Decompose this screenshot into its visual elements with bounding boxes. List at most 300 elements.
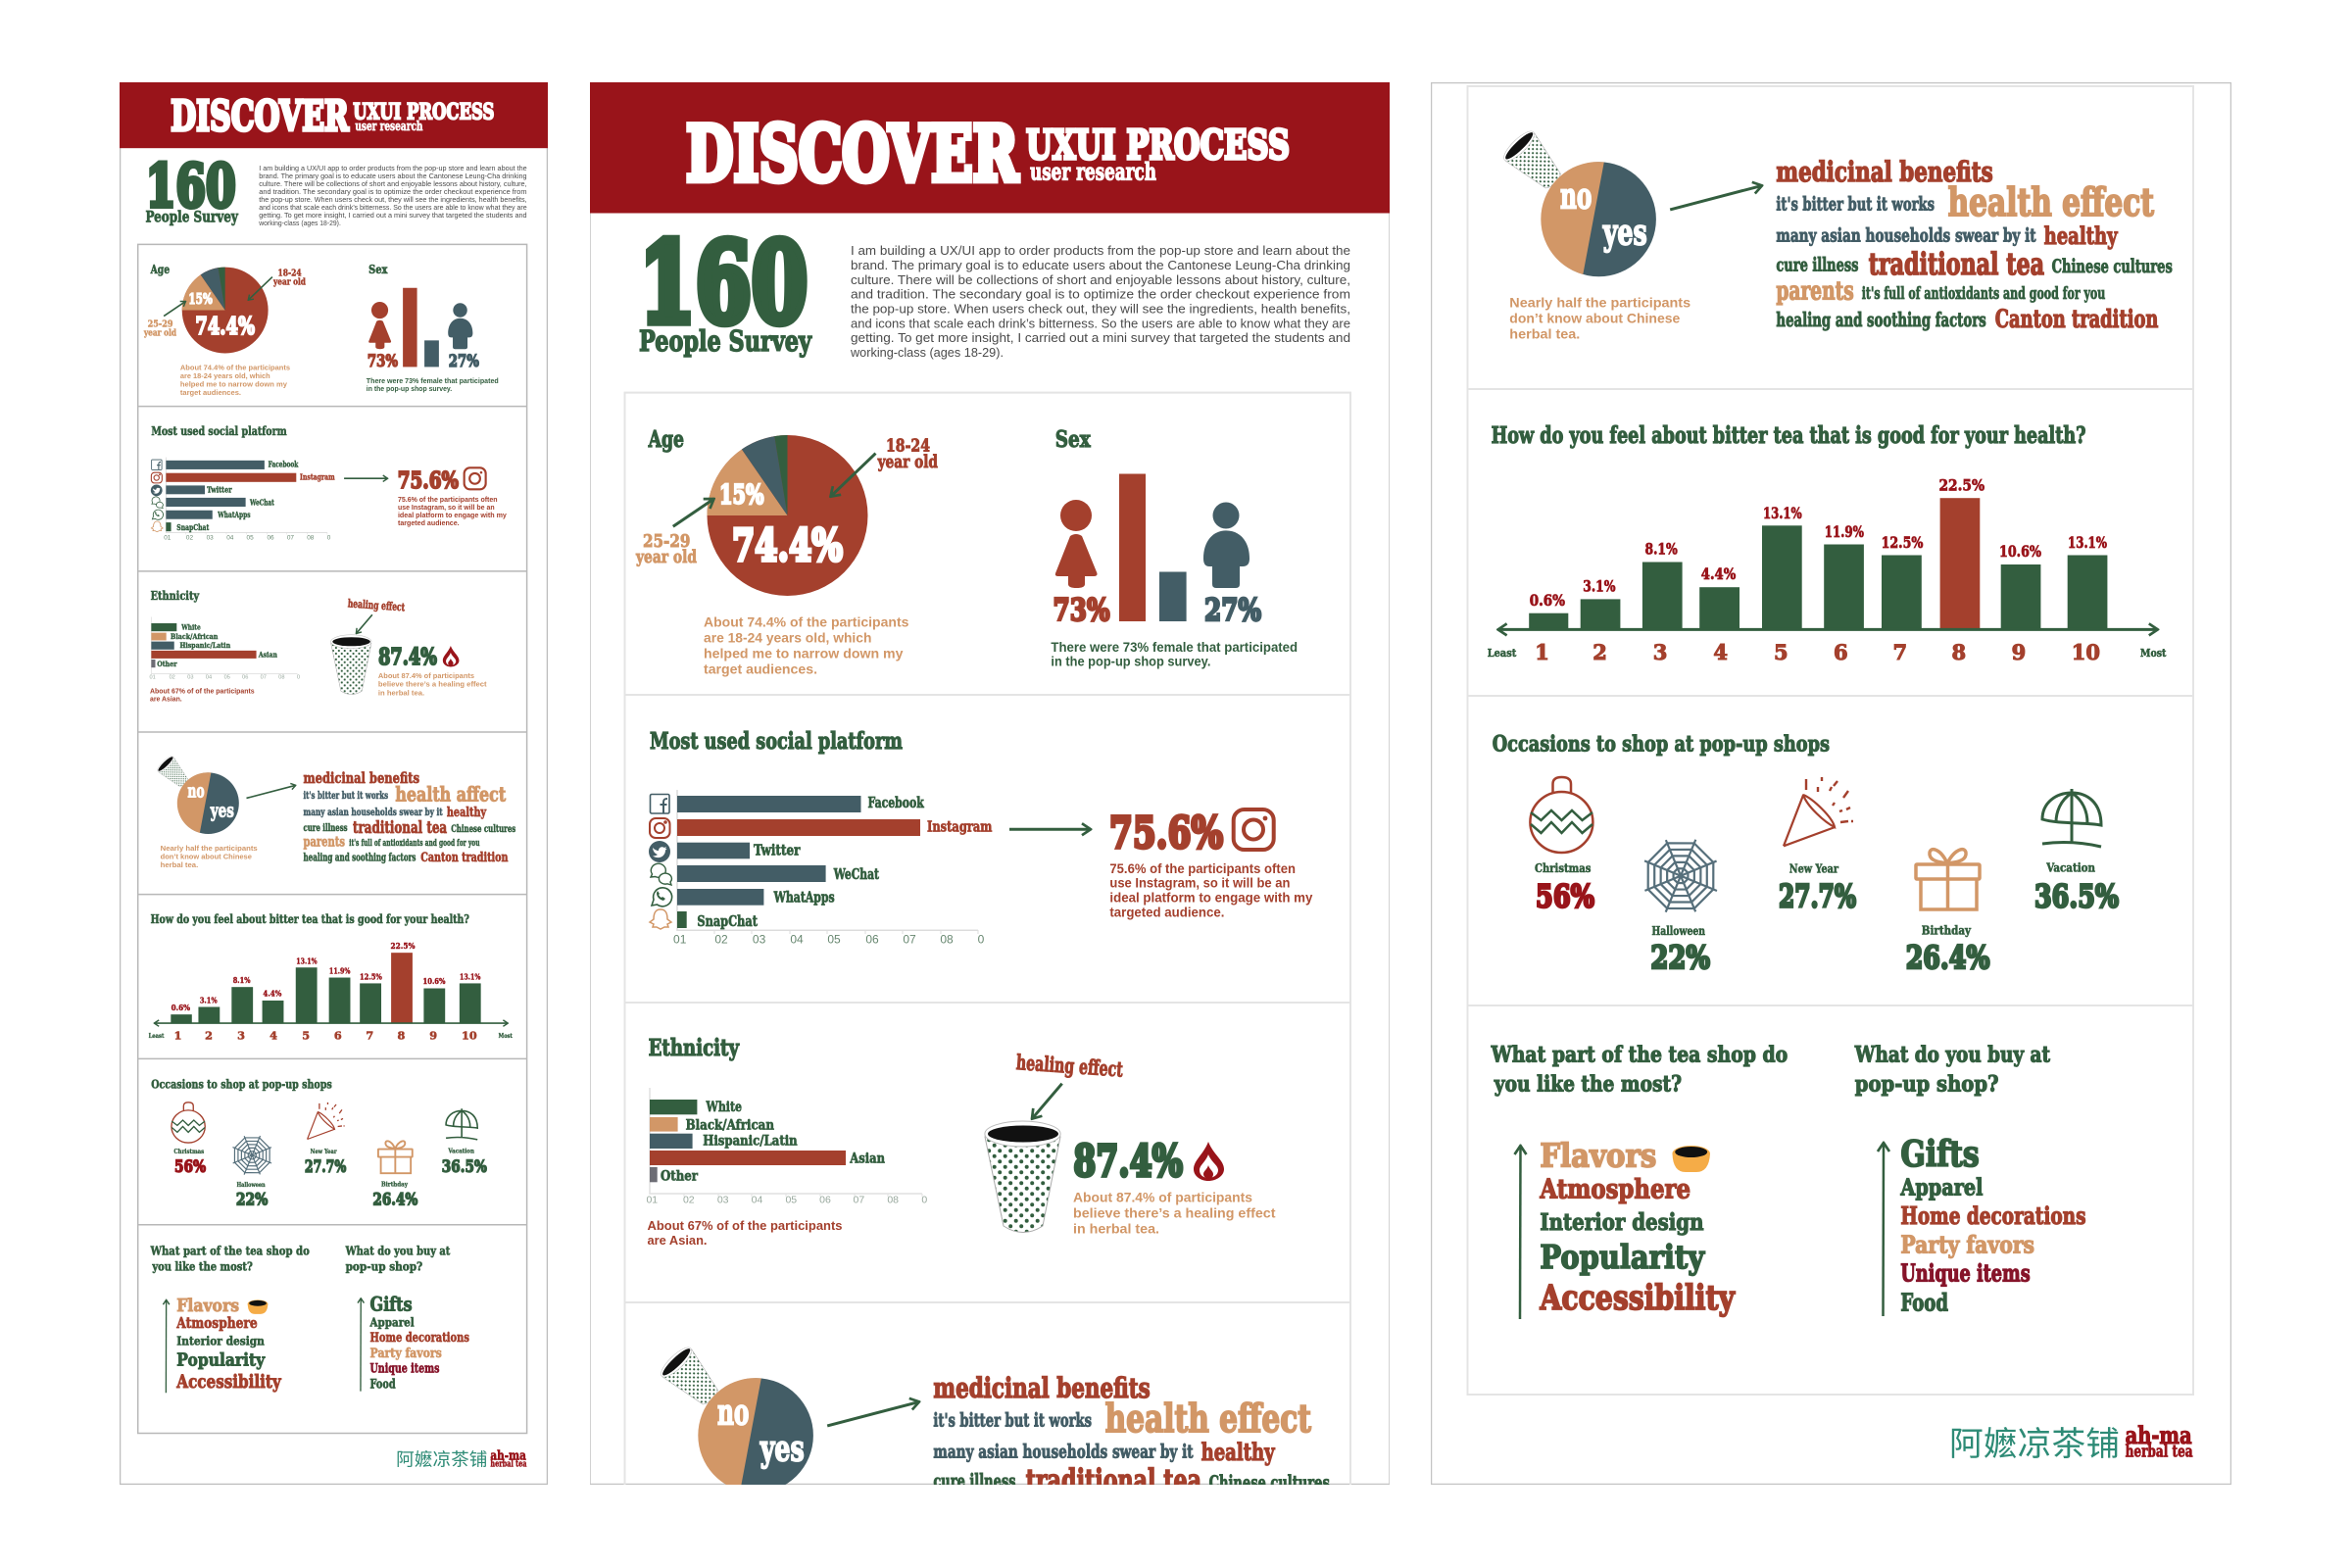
section: herbal tea awareness and word cloud: medicinal benefits	[303, 769, 419, 787]
section: favourite part of the tea shop: Flavors	[1540, 1137, 1656, 1175]
section: favourite part of the tea shop: What part of the tea shop do	[150, 1244, 310, 1257]
section: age: Age	[150, 262, 170, 276]
section: occasions: Occasions to shop at pop-up shops	[1493, 732, 1830, 758]
section: favourite part of the tea shop: you like the most?	[152, 1260, 253, 1274]
section: herbal tea awareness and word cloud: healthy	[2044, 221, 2118, 250]
section: bitter tea bar chart: 5	[302, 1029, 310, 1043]
intro paragraph: culture. There will be collections of short and enjoyable lessons about history, culture,	[851, 272, 1350, 287]
section: herbal tea awareness and word cloud: traditional tea	[353, 817, 447, 837]
section: herbal tea awareness and word cloud: Canton tradition	[1995, 305, 2158, 333]
section: what people buy: pop-up shop?	[1855, 1071, 1999, 1097]
section: age: 15%	[188, 291, 213, 308]
section: what people buy: Unique items	[1900, 1259, 2031, 1288]
section: ethnicity: 0	[921, 1195, 927, 1206]
section: bitter tea bar chart: 10	[462, 1029, 477, 1043]
section: herbal tea awareness and word cloud, cropped: healthy	[1201, 1438, 1275, 1466]
section: herbal tea awareness and word cloud, cropped: health effect	[1105, 1396, 1311, 1442]
section: herbal tea awareness and word cloud: no	[1560, 176, 1592, 218]
section: bitter tea bar chart: 10	[2072, 640, 2100, 664]
section: bitter tea bar chart: 3.1%	[1583, 577, 1615, 596]
section: herbal tea awareness and word cloud, cropped: Chinese cultures	[1209, 1472, 1330, 1494]
section: social platform: 01	[673, 933, 687, 947]
section: herbal tea awareness and word cloud: health affect	[395, 782, 506, 807]
section: ethnicity: 04	[752, 1195, 762, 1206]
section: occasions: Halloween	[236, 1181, 266, 1189]
section: occasions: New Year	[1789, 862, 1839, 876]
section: herbal tea awareness and word cloud: healthy	[447, 806, 487, 820]
section: age: 15%	[719, 480, 764, 511]
section: social platform: SnapChat	[176, 522, 210, 532]
header band: user research	[355, 120, 423, 134]
section: bitter tea bar chart: Most	[499, 1033, 513, 1040]
section: social platform: WhatApps	[217, 510, 251, 519]
section: social platform: Instagram	[300, 471, 335, 481]
section: favourite part of the tea shop: Atmosphere	[1540, 1175, 1690, 1205]
section: social platform: 08	[307, 535, 315, 542]
intro paragraph: and icons that scale each drink’s bitterness. So the users are able to know what they are	[851, 316, 1350, 330]
section: age	[143, 262, 306, 397]
section: occasions: 22%	[236, 1190, 268, 1209]
section: favourite part of the tea shop: Interior design	[1540, 1209, 1704, 1236]
section: sex: in the pop-up shop survey.	[367, 384, 452, 393]
section: bitter tea bar chart: 3	[1653, 640, 1667, 664]
stat: 160 people survey: People Survey	[639, 324, 812, 358]
section: occasions: Occasions to shop at pop-up shops	[151, 1078, 332, 1092]
section: ethnicity: Other	[661, 1168, 699, 1184]
panel: poster top detail	[590, 82, 1390, 1498]
section: age: year old	[877, 452, 938, 472]
section: ethnicity: 04	[206, 675, 212, 681]
section: favourite part of the tea shop: What part of the tea shop do	[1491, 1042, 1788, 1067]
section: age: year old	[272, 276, 306, 287]
section: ethnicity: 08	[887, 1195, 899, 1206]
section: herbal tea awareness and word cloud: herbal tea.	[161, 860, 198, 869]
intro paragraph: culture. There will be collections of short and enjoyable lessons about history, culture,	[259, 181, 527, 188]
section: occasions: 36.5%	[442, 1157, 487, 1177]
section: bitter tea bar chart: 22.5%	[1938, 475, 1984, 494]
section: ethnicity: 0	[297, 675, 300, 681]
section: age: About 74.4% of the participants	[704, 613, 909, 629]
section: bitter tea bar chart: 4	[1713, 640, 1728, 664]
section: herbal tea awareness and word cloud: cure illness	[1776, 254, 1858, 275]
section: herbal tea awareness and word cloud: don’t know about Chinese	[161, 852, 252, 860]
section: social platform: 07	[287, 535, 294, 542]
section: ethnicity: healing effect	[1015, 1050, 1124, 1082]
section frame	[138, 244, 527, 1434]
section: herbal tea awareness and word cloud: herbal tea.	[1509, 326, 1580, 342]
section: what people buy: Party favors	[370, 1347, 442, 1361]
section: ethnicity: believe there’s a healing effect	[1073, 1205, 1276, 1221]
section: what people buy: What do you buy at	[1854, 1042, 2050, 1067]
section: herbal tea awareness and word cloud	[155, 754, 515, 869]
header band: UXUI PROCESS	[1026, 122, 1290, 169]
section: social platform: 0	[327, 535, 331, 542]
section: bitter tea bar chart	[149, 911, 513, 1043]
header band: UXUI PROCESS	[353, 99, 494, 124]
section: social platform: 04	[226, 535, 234, 542]
section: occasions: Christmas	[1535, 861, 1592, 875]
section: bitter tea bar chart: 3	[237, 1029, 245, 1043]
section frame	[1468, 86, 2193, 1395]
section: age: Age	[648, 426, 684, 453]
section: social platform: 0	[978, 933, 985, 947]
section: sex: 73%	[368, 351, 398, 370]
section: bitter tea bar chart: 8.1%	[233, 976, 251, 986]
section: herbal tea awareness and word cloud: it's full of antioxidants and good for you	[349, 838, 480, 849]
section: occasions: Halloween	[1652, 924, 1705, 938]
section: age: 18-24	[278, 268, 302, 278]
section: occasions: 27.7%	[305, 1157, 346, 1177]
section: bitter tea bar chart: How do you feel about bitter tea that is good for your health?	[1492, 422, 2085, 449]
section: herbal tea awareness and word cloud: it's bitter but it works	[1776, 194, 1935, 216]
section: bitter tea bar chart: 7	[366, 1029, 373, 1043]
section: social platform: WeChat	[833, 865, 879, 883]
section: bitter tea bar chart: 0.6%	[1530, 591, 1565, 610]
header band: DISCOVER	[686, 110, 1019, 199]
section: herbal tea awareness and word cloud: traditional tea	[1869, 247, 2044, 282]
section: occasions: 56%	[174, 1157, 206, 1177]
section: ethnicity: White	[706, 1100, 742, 1115]
section: what people buy: pop-up shop?	[346, 1260, 422, 1274]
section: herbal tea awareness and word cloud: health effect	[1948, 180, 2154, 225]
section: favourite part of the tea shop	[1491, 1042, 1788, 1319]
section: favourite part of the tea shop: Popularity	[176, 1349, 266, 1370]
section: ethnicity: 87.4%	[1073, 1137, 1183, 1187]
section: herbal tea awareness and word cloud, cropped: many asian households swear by it	[933, 1441, 1194, 1462]
section: herbal tea awareness and word cloud: cure illness	[303, 822, 348, 834]
logo: 阿嬷凉茶铺	[1949, 1426, 2120, 1463]
intro paragraph: I am building a UX/UI app to order products from the pop-up store and learn about the	[851, 243, 1350, 258]
section: ethnicity: Black/African	[171, 632, 219, 641]
section: herbal tea awareness and word cloud: yes	[1602, 212, 1647, 253]
section: age: are 18-24 years old, which	[704, 629, 871, 645]
section: social platform: 06	[865, 933, 879, 947]
section: age: 74.4%	[195, 312, 255, 340]
section: bitter tea bar chart: 7	[1892, 640, 1907, 664]
section: social platform: targeted audience.	[1109, 906, 1224, 919]
section: what people buy: Gifts	[1900, 1134, 1980, 1175]
section: social platform: 75.6% of the participants often	[1109, 861, 1296, 876]
section: social platform: Facebook	[269, 459, 299, 468]
section: sex: Sex	[368, 262, 388, 276]
section: what people buy: Gifts	[370, 1294, 413, 1316]
section: herbal tea awareness and word cloud, cropped: no	[717, 1393, 749, 1434]
section: what people buy: What do you buy at	[345, 1244, 451, 1257]
section: ethnicity: Asian	[258, 650, 277, 659]
section: what people buy: Party favors	[1900, 1230, 2034, 1258]
section: sex: There were 73% female that participated	[367, 376, 499, 385]
section: age	[635, 426, 938, 677]
section: social platform	[649, 728, 1313, 947]
section: social platform: 05	[827, 933, 841, 947]
section: age: are 18-24 years old, which	[180, 371, 270, 380]
header band: DISCOVER	[171, 92, 349, 140]
stat: 160 people survey: 160	[639, 220, 808, 348]
section: what people buy: Food	[1900, 1288, 1948, 1316]
section: ethnicity: in herbal tea.	[1073, 1221, 1159, 1237]
section: what people buy	[1854, 1042, 2085, 1316]
section: ethnicity: White	[180, 622, 201, 631]
section: age: target audiences.	[704, 662, 817, 677]
section: social platform: Twitter	[207, 484, 232, 494]
section: what people buy: Apparel	[1900, 1174, 1984, 1200]
section: occasions: Vacation	[2045, 860, 2095, 874]
section: social platform: Facebook	[868, 794, 924, 811]
intro paragraph: working-class (ages 18-29).	[258, 220, 341, 227]
section: favourite part of the tea shop: Accessibility	[1540, 1278, 1736, 1318]
section: ethnicity: Ethnicity	[649, 1035, 739, 1061]
section: social platform: ideal platform to engage with my	[398, 511, 507, 519]
intro paragraph: the pop-up store. When users check out, they will see the ingredients, health benefits,	[851, 302, 1350, 316]
intro paragraph: getting. To get more insight, I carried out a mini survey that targeted the students and	[851, 330, 1350, 345]
section: occasions	[151, 1078, 487, 1209]
section: social platform: targeted audience.	[398, 518, 460, 527]
logo: ah-ma	[2126, 1421, 2192, 1449]
section: occasions: 22%	[1650, 939, 1710, 976]
section: herbal tea awareness and word cloud: parents	[303, 834, 345, 850]
section: social platform: 07	[903, 933, 916, 947]
section: herbal tea awareness and word cloud, cropped: yes	[760, 1428, 805, 1469]
section: bitter tea bar chart: 9	[429, 1029, 437, 1043]
section: occasions: 36.5%	[2034, 878, 2119, 915]
section: ethnicity	[646, 1035, 1276, 1248]
section: what people buy	[345, 1244, 469, 1393]
section: bitter tea bar chart: How do you feel about bitter tea that is good for your health?	[151, 911, 469, 926]
section: ethnicity: healing effect	[347, 596, 406, 613]
logo: 阿嬷凉茶铺	[396, 1450, 487, 1470]
section: ethnicity: 07	[261, 675, 267, 681]
logo: ah-ma	[490, 1448, 526, 1463]
section: occasions: Vacation	[448, 1147, 474, 1154]
section: herbal tea awareness and word cloud: parents	[1776, 276, 1854, 306]
section: herbal tea awareness and word cloud: Chinese cultures	[2052, 256, 2173, 277]
section: bitter tea bar chart: 12.5%	[360, 972, 382, 982]
section: bitter tea bar chart	[1488, 422, 2167, 664]
section: ethnicity: 01	[149, 675, 156, 681]
section: bitter tea bar chart: 0.6%	[172, 1004, 190, 1013]
section: sex	[367, 262, 499, 393]
section: herbal tea awareness and word cloud: it's full of antioxidants and good for you	[1862, 284, 2105, 304]
section: age: helped me to narrow down my	[704, 646, 904, 662]
section: ethnicity: 87.4%	[378, 643, 437, 670]
section: social platform: 04	[790, 933, 804, 947]
section: social platform: 05	[247, 535, 254, 542]
section: ethnicity: 01	[646, 1195, 658, 1206]
intro paragraph: and icons that scale each drink’s bitterness. So the users are able to know what they are	[259, 205, 527, 212]
section: bitter tea bar chart: Least	[149, 1033, 165, 1040]
intro paragraph: and tradition. The secondary goal is to optimize the order checkout experience from	[851, 287, 1350, 302]
section: social platform: Most used social platform	[650, 728, 903, 755]
section: occasions: Birthday	[1922, 923, 1972, 937]
section: sex: 27%	[1204, 593, 1261, 628]
section: social platform: 75.6%	[1109, 808, 1223, 858]
section: bitter tea bar chart: 13.1%	[2068, 533, 2107, 552]
section: bitter tea bar chart: 12.5%	[1882, 533, 1923, 552]
section: ethnicity: are Asian.	[647, 1233, 708, 1248]
section: bitter tea bar chart: 8	[1951, 640, 1966, 664]
section: bitter tea bar chart: 11.9%	[1825, 522, 1864, 541]
section: sex: Sex	[1055, 426, 1091, 453]
section: bitter tea bar chart: Most	[2140, 646, 2167, 660]
section: ethnicity: 06	[242, 675, 248, 681]
section: bitter tea bar chart: 3.1%	[200, 996, 218, 1005]
section: favourite part of the tea shop: you like the most?	[1494, 1071, 1682, 1097]
panel: poster bottom detail	[1431, 82, 2230, 1484]
section: ethnicity: in herbal tea.	[378, 688, 424, 697]
section: herbal tea awareness and word cloud: medicinal benefits	[1776, 156, 1993, 188]
section: bitter tea bar chart: 8.1%	[1644, 540, 1678, 559]
section: bitter tea bar chart: 11.9%	[329, 967, 350, 977]
stat: 160 people survey: 160	[146, 152, 236, 220]
section: social platform: 03	[207, 535, 214, 542]
section: age: helped me to narrow down my	[180, 380, 288, 389]
section: social platform: 75.6% of the participants often	[398, 495, 498, 504]
section: what people buy: Unique items	[370, 1362, 439, 1377]
section: ethnicity: 06	[819, 1195, 831, 1206]
section: favourite part of the tea shop: Popularity	[1540, 1238, 1705, 1276]
section: what people buy: Home decorations	[1900, 1201, 2085, 1230]
section: occasions: 27.7%	[1779, 878, 1856, 915]
section: bitter tea bar chart: 4.4%	[1701, 564, 1736, 583]
section: age: year old	[143, 327, 176, 338]
section: ethnicity: Hispanic/Latin	[703, 1133, 798, 1149]
section: herbal tea awareness and word cloud: yes	[210, 799, 234, 821]
logo	[398, 1449, 527, 1467]
section: ethnicity: Black/African	[686, 1117, 774, 1133]
section: ethnicity: 02	[683, 1195, 695, 1206]
section: social platform: 02	[186, 535, 193, 542]
intro paragraph: brand. The primary goal is to educate users about the Cantonese Leung-Cha drinking	[259, 173, 527, 180]
section: social platform: WhatApps	[773, 889, 835, 906]
section: what people buy: Food	[370, 1378, 396, 1393]
section: bitter tea bar chart: 13.1%	[296, 956, 318, 966]
section: herbal tea awareness and word cloud, cropped: it's bitter but it works	[933, 1410, 1092, 1432]
section: social platform	[151, 423, 507, 542]
section: herbal tea awareness and word cloud, cropped: medicinal benefits	[933, 1372, 1151, 1404]
section: age: 25-29	[148, 319, 173, 330]
section: ethnicity: Other	[157, 660, 178, 668]
section: social platform: 08	[940, 933, 954, 947]
section: what people buy: Home decorations	[370, 1331, 469, 1346]
section: age: 18-24	[886, 436, 930, 457]
section: ethnicity: Asian	[849, 1151, 885, 1166]
logo: herbal tea	[490, 1459, 526, 1470]
section: occasions: 26.4%	[1906, 939, 1989, 976]
section: ethnicity: Hispanic/Latin	[179, 641, 231, 650]
section: favourite part of the tea shop: Interior design	[176, 1333, 265, 1348]
section: herbal tea awareness and word cloud: healing and soothing factors	[303, 851, 416, 863]
section: occasions: 56%	[1536, 878, 1594, 915]
section: social platform: SnapChat	[697, 912, 758, 930]
section: bitter tea bar chart: 2	[205, 1029, 213, 1043]
section: bitter tea bar chart: 6	[334, 1029, 342, 1043]
section: herbal tea awareness and word cloud: many asian households swear by it	[1776, 225, 2036, 247]
section: favourite part of the tea shop: Accessibility	[176, 1371, 282, 1393]
header band	[590, 82, 1390, 214]
section: ethnicity: About 87.4% of participants	[378, 671, 474, 680]
section: occasions: New Year	[311, 1148, 337, 1155]
section: ethnicity: are Asian.	[150, 696, 182, 703]
section: bitter tea bar chart: 4.4%	[263, 990, 281, 1000]
section: herbal tea awareness and word cloud: don’t know about Chinese	[1509, 310, 1680, 325]
intro paragraph: working-class (ages 18-29).	[850, 345, 1004, 360]
section: occasions: Birthday	[381, 1181, 408, 1189]
section: herbal tea awareness and word cloud: Canton tradition	[420, 850, 509, 865]
section: sex: in the pop-up shop survey.	[1051, 654, 1210, 668]
section: social platform: Twitter	[754, 842, 801, 859]
logo: herbal tea	[2126, 1443, 2193, 1462]
section: bitter tea bar chart: 8	[397, 1029, 405, 1043]
section: social platform: 01	[164, 535, 172, 542]
section: social platform: Most used social platform	[151, 423, 287, 438]
section: ethnicity: 08	[278, 675, 285, 681]
section: bitter tea bar chart: 5	[1774, 640, 1788, 664]
logo	[1952, 1425, 2193, 1458]
section: herbal tea awareness and word cloud: Nearly half the participants	[1509, 294, 1690, 310]
section: social platform: WeChat	[249, 497, 274, 507]
section: herbal tea awareness and word cloud: many asian households swear by it	[303, 807, 443, 818]
section: age: About 74.4% of the participants	[180, 363, 290, 371]
section: herbal tea awareness and word cloud: no	[187, 780, 205, 803]
section: herbal tea awareness and word cloud, cropped	[661, 1347, 1329, 1485]
intro paragraph	[850, 243, 1350, 360]
intro paragraph: and tradition. The secondary goal is to optimize the order checkout experience from	[259, 189, 527, 196]
section: bitter tea bar chart: 1	[174, 1029, 181, 1043]
section: ethnicity	[149, 588, 487, 703]
section: herbal tea awareness and word cloud, cropped: cure illness	[933, 1470, 1015, 1492]
section: bitter tea bar chart: 22.5%	[391, 942, 415, 952]
section: bitter tea bar chart: 6	[1834, 640, 1848, 664]
section: bitter tea bar chart: 13.1%	[1763, 504, 1802, 522]
section: herbal tea awareness and word cloud: healing and soothing factors	[1776, 308, 1986, 331]
section: herbal tea awareness and word cloud: it's bitter but it works	[303, 790, 388, 802]
intro paragraph: getting. To get more insight, I carried out a mini survey that targeted the students and	[259, 213, 527, 220]
section: bitter tea bar chart: 4	[270, 1029, 277, 1043]
section: herbal tea awareness and word cloud: Nearly half the participants	[161, 844, 258, 853]
section: herbal tea awareness and word cloud: Chinese cultures	[451, 823, 515, 835]
stat: 160 people survey	[639, 235, 813, 359]
section: social platform: ideal platform to engage with my	[1109, 891, 1313, 906]
section: age: year old	[635, 547, 697, 567]
intro paragraph	[258, 166, 527, 227]
intro paragraph: brand. The primary goal is to educate users about the Cantonese Leung-Cha drinking	[851, 258, 1350, 272]
section: ethnicity: 03	[187, 675, 194, 681]
section: sex: 27%	[449, 351, 479, 370]
section: ethnicity: 05	[224, 675, 230, 681]
section: ethnicity: 02	[170, 675, 175, 681]
section: bitter tea bar chart: 9	[2012, 640, 2026, 664]
section: social platform: use Instagram, so it will be an	[1109, 876, 1290, 891]
section: ethnicity: About 87.4% of participants	[1073, 1190, 1252, 1205]
section: bitter tea bar chart: 13.1%	[460, 972, 480, 982]
section: social platform: 06	[267, 535, 274, 542]
section: sex: There were 73% female that participated	[1051, 640, 1298, 655]
section: herbal tea awareness and word cloud, cropped: traditional tea	[1026, 1463, 1201, 1498]
section: occasions: 26.4%	[372, 1190, 417, 1209]
stat: 160 people survey: People Survey	[145, 207, 239, 225]
section: what people buy: Apparel	[369, 1314, 415, 1329]
section: bitter tea bar chart: 2	[1592, 640, 1607, 664]
section: favourite part of the tea shop: Atmosphere	[175, 1315, 258, 1332]
section: social platform: 03	[753, 933, 766, 947]
section: social platform: use Instagram, so it will be an	[398, 503, 495, 512]
section: favourite part of the tea shop: Flavors	[176, 1296, 239, 1316]
section: ethnicity: About 67% of of the participants	[150, 688, 255, 695]
section: ethnicity: 05	[785, 1195, 797, 1206]
header band	[120, 82, 548, 148]
intro paragraph: I am building a UX/UI app to order products from the pop-up store and learn about the	[259, 166, 527, 172]
section: age: 25-29	[643, 531, 690, 552]
